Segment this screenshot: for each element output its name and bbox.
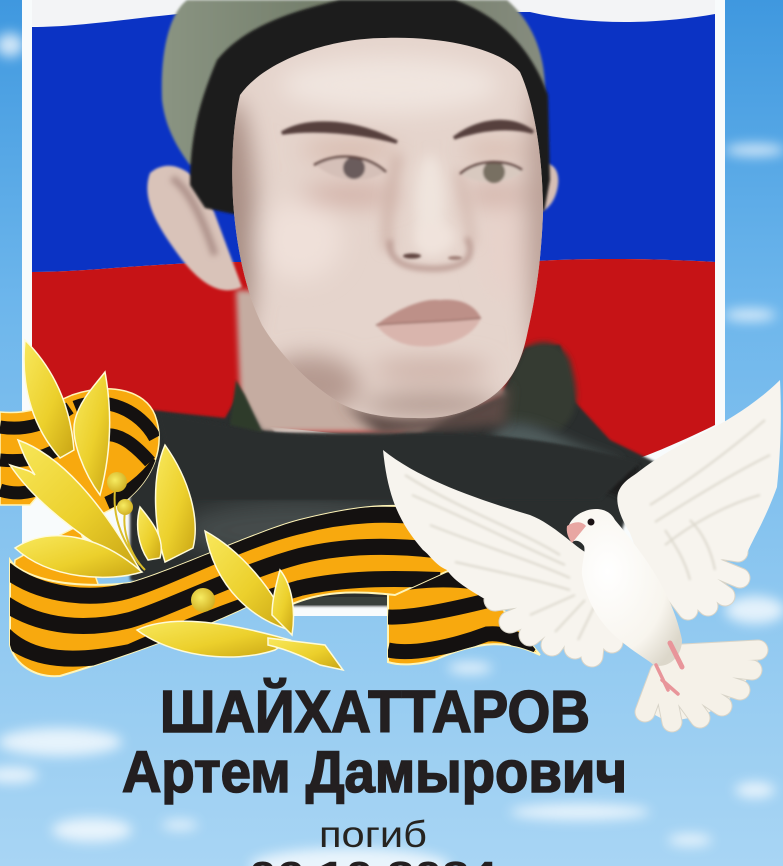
large middle leaf <box>10 440 140 570</box>
white dove <box>383 380 781 722</box>
face <box>232 38 543 418</box>
collar fold <box>230 380 262 432</box>
right eyebrow <box>454 122 533 138</box>
branch stems <box>115 490 145 570</box>
clothing <box>130 342 657 606</box>
berry lower <box>117 499 133 515</box>
right wing <box>617 380 781 610</box>
body and head <box>568 509 682 666</box>
ribbon tail right <box>387 572 541 666</box>
neck shadow <box>340 385 510 436</box>
left ear <box>147 166 242 290</box>
band under photo <box>296 597 392 605</box>
right ear <box>540 164 558 212</box>
branch end <box>268 638 343 670</box>
beak <box>567 522 586 543</box>
lips <box>376 300 481 347</box>
ribbon main band <box>0 506 450 676</box>
collar <box>158 412 640 500</box>
small inner leaf <box>138 507 161 560</box>
berry upper <box>107 472 127 492</box>
first name and patronymic: Артем Дамырович <box>122 740 627 805</box>
small branch leaf <box>272 570 294 635</box>
caption: perished: погиб <box>319 814 427 855</box>
left wing <box>383 450 612 656</box>
large berry <box>191 588 215 612</box>
left eyebrow <box>282 123 397 142</box>
left eye <box>314 157 386 180</box>
tail <box>642 640 758 722</box>
right standing leaf <box>156 445 195 562</box>
golden laurel branch <box>10 340 343 670</box>
ribbon top loop <box>0 389 159 590</box>
hair <box>190 0 550 215</box>
cap <box>162 0 545 165</box>
feet <box>656 643 682 694</box>
lower branch leaf <box>205 531 290 630</box>
right eye <box>460 161 522 183</box>
surname: ШАЙХАТТАРОВ <box>160 678 590 745</box>
upper centre leaf <box>74 372 110 495</box>
white photo frame <box>22 0 725 616</box>
russian flag <box>32 0 715 462</box>
nose <box>390 222 470 269</box>
neck <box>236 290 505 432</box>
upper left leaf <box>24 340 74 458</box>
eye <box>588 518 594 526</box>
soldier portrait <box>130 0 657 606</box>
long bottom leaf <box>137 621 290 657</box>
lower left leaf <box>15 536 142 577</box>
